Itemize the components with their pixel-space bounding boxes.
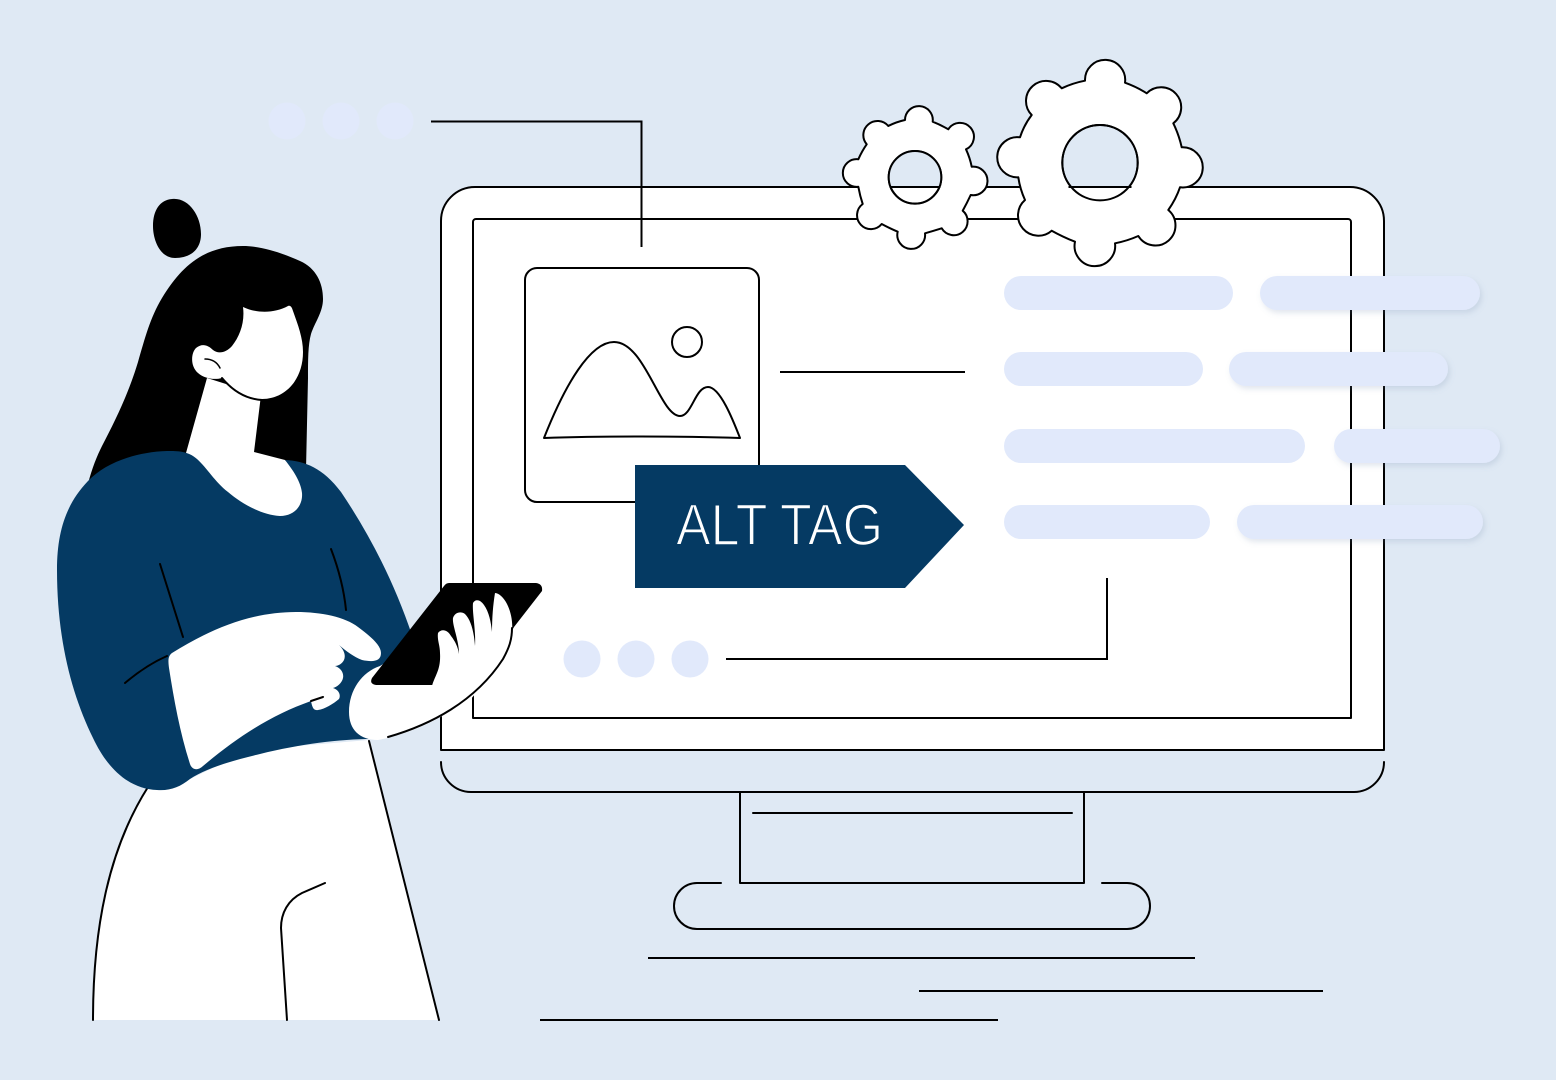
person	[57, 199, 542, 1020]
chin line	[222, 378, 262, 400]
monitor outer frame	[441, 187, 1384, 750]
skirt outlines	[93, 741, 439, 1020]
bottom three dots	[564, 640, 708, 678]
shirt fold lines	[125, 549, 346, 683]
top three dots	[268, 102, 414, 140]
connector: bottom	[726, 578, 1107, 659]
shirt	[57, 451, 412, 790]
monitor screen	[473, 219, 1351, 718]
neck and chest	[186, 378, 305, 520]
text pills	[1004, 276, 1500, 539]
floor lines	[540, 958, 1323, 1020]
monitor	[441, 187, 1384, 929]
tablet	[371, 583, 542, 688]
small gear	[843, 106, 988, 249]
image placeholder	[525, 268, 759, 502]
monitor stand	[740, 792, 1084, 883]
hand outline	[388, 628, 512, 737]
tag shape	[635, 465, 964, 588]
large gear	[997, 60, 1203, 266]
alt tag label	[635, 465, 964, 588]
image mountains	[544, 342, 740, 438]
holding hand	[349, 620, 512, 740]
image sun	[672, 327, 702, 357]
face	[192, 306, 303, 399]
thumb line	[311, 697, 323, 701]
forearm and pointing hand	[168, 612, 381, 769]
tag text: ALT TAG	[676, 493, 883, 558]
hair bun	[153, 199, 201, 258]
ear line	[205, 359, 220, 368]
hair	[88, 246, 323, 484]
monitor chin	[441, 762, 1384, 792]
skirt	[93, 740, 439, 1020]
image frame	[525, 268, 759, 502]
monitor base	[674, 883, 1150, 929]
fingers	[420, 593, 512, 705]
connector: top	[431, 122, 642, 247]
connector: image to text	[780, 371, 965, 373]
